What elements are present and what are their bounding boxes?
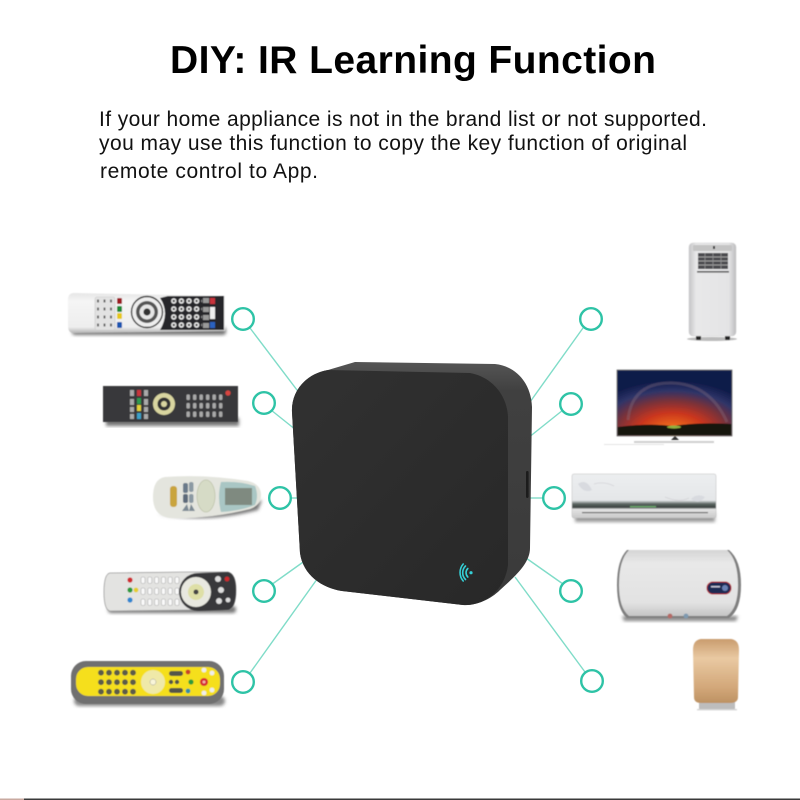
connector: air purifier xyxy=(515,577,603,692)
connector: remote 1 xyxy=(232,308,300,394)
description text: you may use this function to copy the key function of original xyxy=(99,132,687,155)
remote 3: air conditioner remote xyxy=(153,476,262,518)
connector: remote 5 xyxy=(232,575,320,693)
icon: IR signal xyxy=(460,564,473,581)
remote 5: yellow remote xyxy=(71,661,225,706)
water heater xyxy=(617,550,741,621)
split air conditioner xyxy=(572,474,716,522)
connector: remote 3 xyxy=(269,487,300,509)
portable air conditioner xyxy=(687,243,737,341)
connector: portable air conditioner xyxy=(530,308,602,402)
connector: remote 2 xyxy=(253,392,296,430)
description text: remote control to App. xyxy=(100,160,318,183)
remote 1: white TV remote xyxy=(68,293,226,335)
remote 4: silver media remote xyxy=(104,572,236,613)
bottom edge strip xyxy=(0,798,800,800)
connector: water heater xyxy=(526,558,582,602)
description text: If your home appliance is not in the brand list or not supported. xyxy=(99,108,707,131)
title: DIY: IR Learning Function xyxy=(170,39,656,82)
description text xyxy=(99,108,707,183)
air purifier xyxy=(693,639,739,710)
connector: remote 4 xyxy=(253,560,306,602)
television xyxy=(604,370,732,445)
device side port xyxy=(526,471,529,498)
central IR blaster device xyxy=(292,362,532,605)
connector: television xyxy=(528,393,582,438)
remote 2: black TV remote xyxy=(103,386,239,426)
connector: split air conditioner xyxy=(528,487,565,509)
